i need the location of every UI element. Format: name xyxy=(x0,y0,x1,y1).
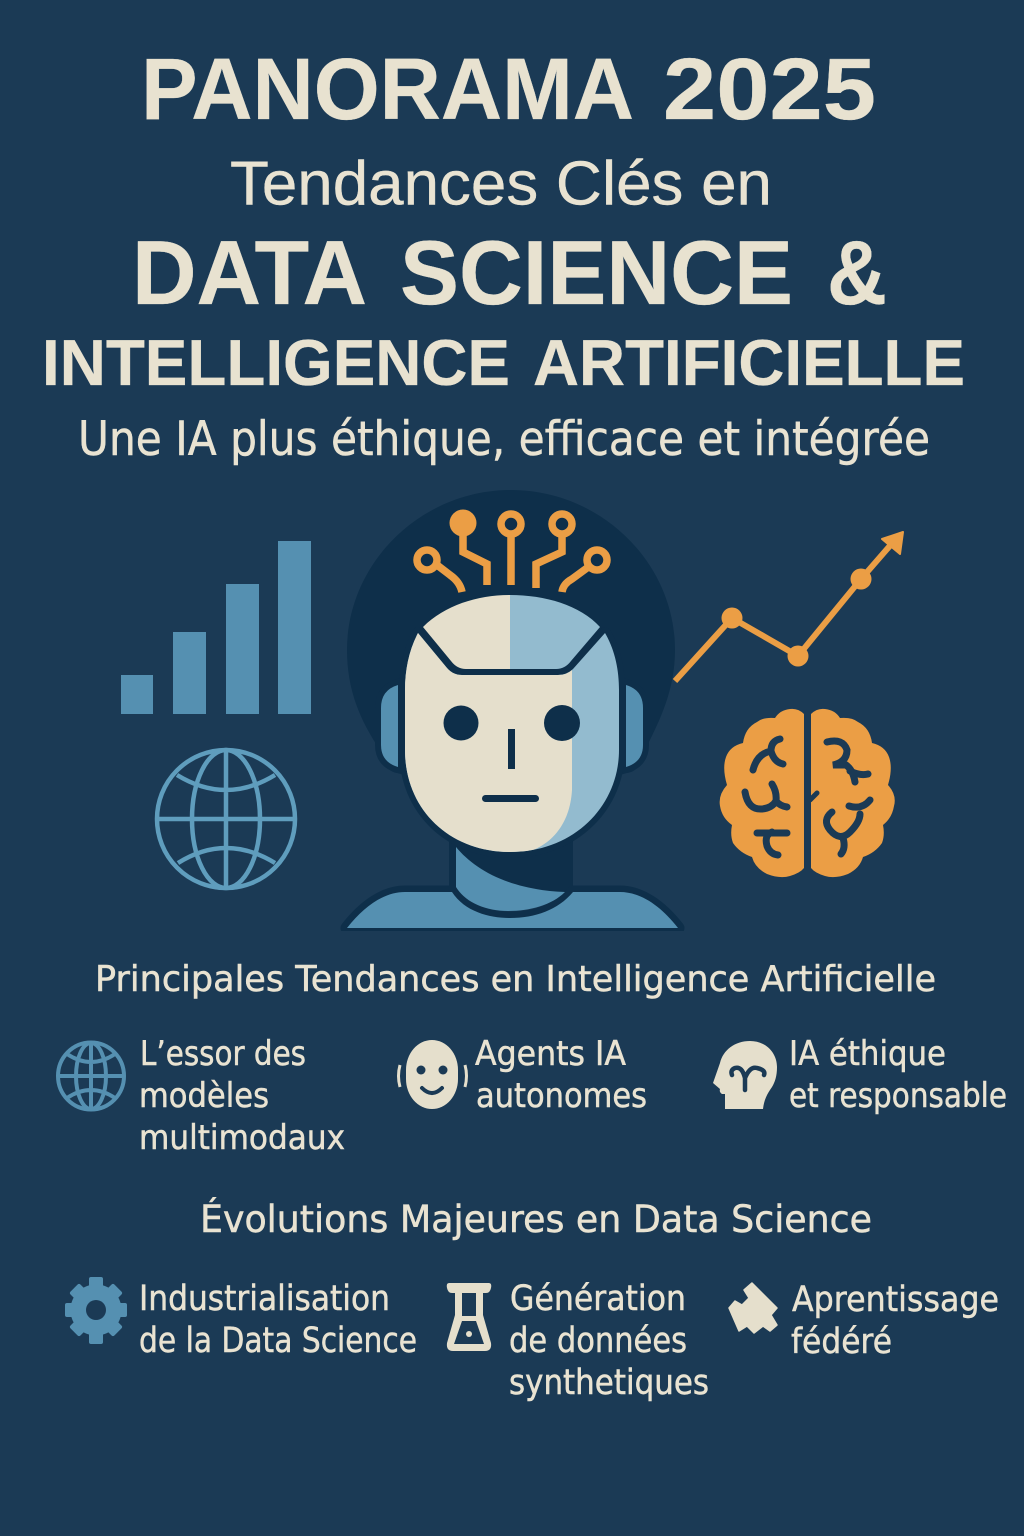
text: multimodal models: multimodaux xyxy=(139,1118,345,1158)
text: multimodal models xyxy=(139,1034,345,1158)
forehead plate right xyxy=(510,595,600,669)
text: synthetic data: de données xyxy=(509,1321,687,1361)
right eye xyxy=(544,705,580,741)
text: ethical AI: IA éthique xyxy=(789,1034,946,1074)
icon: puzzle piece xyxy=(729,1283,777,1333)
icon: brain xyxy=(720,709,895,877)
title: Intelligence Artificielle: ARTIFICIELLE xyxy=(533,326,965,399)
text: industrialisation xyxy=(139,1279,417,1361)
neck front xyxy=(456,847,565,911)
icon: small globe xyxy=(58,1042,124,1110)
text: autonomous agents xyxy=(475,1034,647,1116)
title: Intelligence Artificielle xyxy=(42,326,965,399)
icon: large globe xyxy=(157,750,295,888)
strip below shoulders xyxy=(330,931,700,941)
circuit lines xyxy=(417,514,607,592)
heading: data science evolutions: Évolutions Majeures en Data Science xyxy=(200,1197,872,1241)
heading: AI trends: Principales Tendances en Intelligence Artificielle xyxy=(95,959,936,1000)
text: federated learning: fédéré xyxy=(791,1322,892,1362)
text: industrialisation: de la Data Science xyxy=(139,1321,417,1361)
icon: flask xyxy=(447,1283,491,1351)
icon: gear xyxy=(65,1277,127,1344)
text: synthetic data xyxy=(509,1279,709,1403)
tagline: Une IA plus éthique, efficace et intégrée xyxy=(78,412,930,467)
face cream side xyxy=(405,633,572,852)
title: Panorama 2025: PANORAMA xyxy=(141,41,634,138)
title: Data Science xyxy=(132,223,887,324)
icon: rising line chart xyxy=(675,532,903,681)
text: federated learning xyxy=(791,1280,999,1362)
text: industrialisation: Industrialisation xyxy=(139,1279,390,1319)
icon: agent face xyxy=(398,1040,466,1109)
mouth xyxy=(482,795,539,802)
text: federated learning: Aprentissage xyxy=(792,1280,999,1320)
text: autonomous agents: autonomes xyxy=(476,1076,647,1116)
icon: ethical head xyxy=(713,1041,777,1109)
text: ethical AI xyxy=(789,1034,1007,1116)
ears xyxy=(381,685,643,767)
title block xyxy=(42,41,965,467)
icon: bar chart xyxy=(121,541,311,714)
title: Panorama 2025: 2025 xyxy=(663,41,876,138)
text: multimodal models: modèles xyxy=(139,1076,269,1116)
face outline xyxy=(405,633,619,852)
text: synthetic data: synthetiques xyxy=(509,1363,709,1403)
title: Data Science: & xyxy=(827,223,887,324)
shoulders xyxy=(347,892,678,928)
title: Data Science: DATA xyxy=(132,223,367,324)
dark halo circle xyxy=(347,490,675,773)
title: Panorama 2025 xyxy=(141,41,876,138)
subtitle: Tendances Clés en: Tendances Clés en xyxy=(230,150,772,218)
title: Intelligence Artificielle: INTELLIGENCE xyxy=(42,326,510,399)
illustration: robot head xyxy=(330,490,700,941)
left eye xyxy=(444,706,478,740)
forehead plate left xyxy=(423,595,510,669)
circuit filled node xyxy=(450,510,476,536)
text: synthetic data: Génération xyxy=(510,1279,686,1319)
text: multimodal models: L’essor des xyxy=(140,1034,306,1074)
text: autonomous agents: Agents IA xyxy=(475,1034,626,1074)
nose xyxy=(508,729,515,769)
neck xyxy=(449,840,573,900)
title: Data Science: SCIENCE xyxy=(400,223,793,324)
face xyxy=(405,633,619,852)
